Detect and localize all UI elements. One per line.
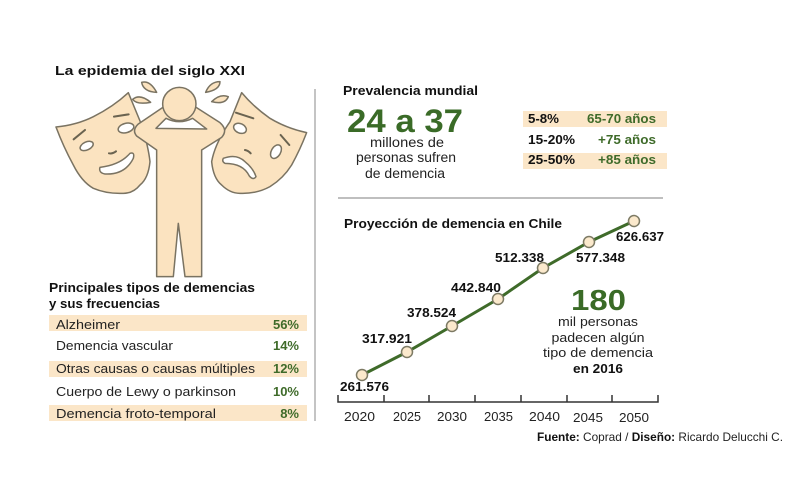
table: prevalence by age: +75 años (598, 132, 656, 147)
icon: sweat drops (133, 82, 228, 103)
source credit: Fuente: Coprad / Diseño: Ricardo Delucchi C. (537, 430, 783, 444)
icon: person (135, 87, 225, 277)
axis years (344, 410, 649, 425)
line chart: dementia projection (338, 216, 664, 425)
data labels: 317.921 (362, 332, 412, 346)
data labels: 626.637 (616, 230, 664, 244)
data labels: 442.840 (451, 281, 501, 295)
table: types of dementia and frequencies: 10% (273, 384, 299, 399)
text: people with dementia in 2016 (543, 314, 654, 376)
table: prevalence by age: +85 años (598, 152, 656, 167)
heading: world prevalence: Prevalencia mundial (343, 83, 478, 98)
icon: happy mask (56, 93, 150, 193)
table: types of dementia and frequencies: Demencia vascular (56, 338, 174, 353)
table: prevalence by age: 25-50% (528, 152, 575, 167)
text: people with dementia: de demencia (365, 166, 445, 181)
text: people with dementia in 2016: padecen algún (552, 330, 644, 345)
table: prevalence by age: 15-20% (528, 132, 575, 147)
table: types of dementia and frequencies: Otras causas o causas múltiples (56, 361, 256, 376)
text: people with dementia in 2016: en 2016 (573, 361, 623, 376)
data labels: 577.348 (576, 251, 625, 265)
text: people with dementia: millones de (370, 135, 444, 150)
axis years: 2025 (393, 410, 421, 424)
data labels: 512.338 (495, 251, 544, 265)
axis years: 2020 (344, 410, 375, 424)
axis years: 2050 (619, 411, 649, 425)
axis years: 2035 (484, 410, 513, 424)
table: prevalence by age: 65-70 años (587, 111, 656, 126)
table: prevalence by age: 5-8% (528, 111, 559, 126)
text: people with dementia in 2016: mil personas (558, 314, 639, 329)
data labels: 378.524 (407, 306, 456, 320)
heading: types of dementia (49, 280, 255, 311)
axis years: 2030 (437, 410, 467, 424)
table: types of dementia and frequencies: Alzheimer (56, 317, 121, 332)
big number: 180: 180 (571, 285, 626, 317)
text: people with dementia: personas sufren (356, 150, 456, 165)
table: types of dementia and frequencies: 8% (280, 406, 299, 421)
title: La epidemia del siglo XXI (55, 63, 245, 78)
big number: 24 a 37: 24 a 37 (347, 103, 463, 139)
table: prevalence by age (523, 111, 667, 169)
data points (356, 216, 640, 380)
trend line (362, 221, 634, 375)
table: types of dementia and frequencies: 12% (273, 361, 299, 376)
axis years: 2040 (529, 410, 560, 424)
table: types of dementia and frequencies: Cuerpo de Lewy o parkinson (56, 384, 236, 399)
heading: types of dementia: y sus frecuencias (49, 296, 160, 311)
icon: sad mask (212, 93, 307, 193)
data labels (340, 230, 664, 394)
table: types of dementia and frequencies: 14% (273, 338, 299, 353)
illustration: person between two masks (56, 82, 307, 277)
text: people with dementia (356, 135, 456, 181)
table: types of dementia and frequencies: 56% (273, 317, 299, 332)
data labels: 261.576 (340, 380, 389, 394)
text: people with dementia in 2016: tipo de demencia (543, 345, 654, 360)
x axis (338, 395, 658, 402)
heading: projection in Chile: Proyección de demencia en Chile (344, 216, 562, 231)
heading: types of dementia: Principales tipos de demencias (49, 280, 255, 295)
table: types of dementia and frequencies (49, 315, 307, 421)
table: types of dementia and frequencies: Demencia froto-temporal (56, 406, 216, 421)
axis years: 2045 (573, 411, 603, 425)
